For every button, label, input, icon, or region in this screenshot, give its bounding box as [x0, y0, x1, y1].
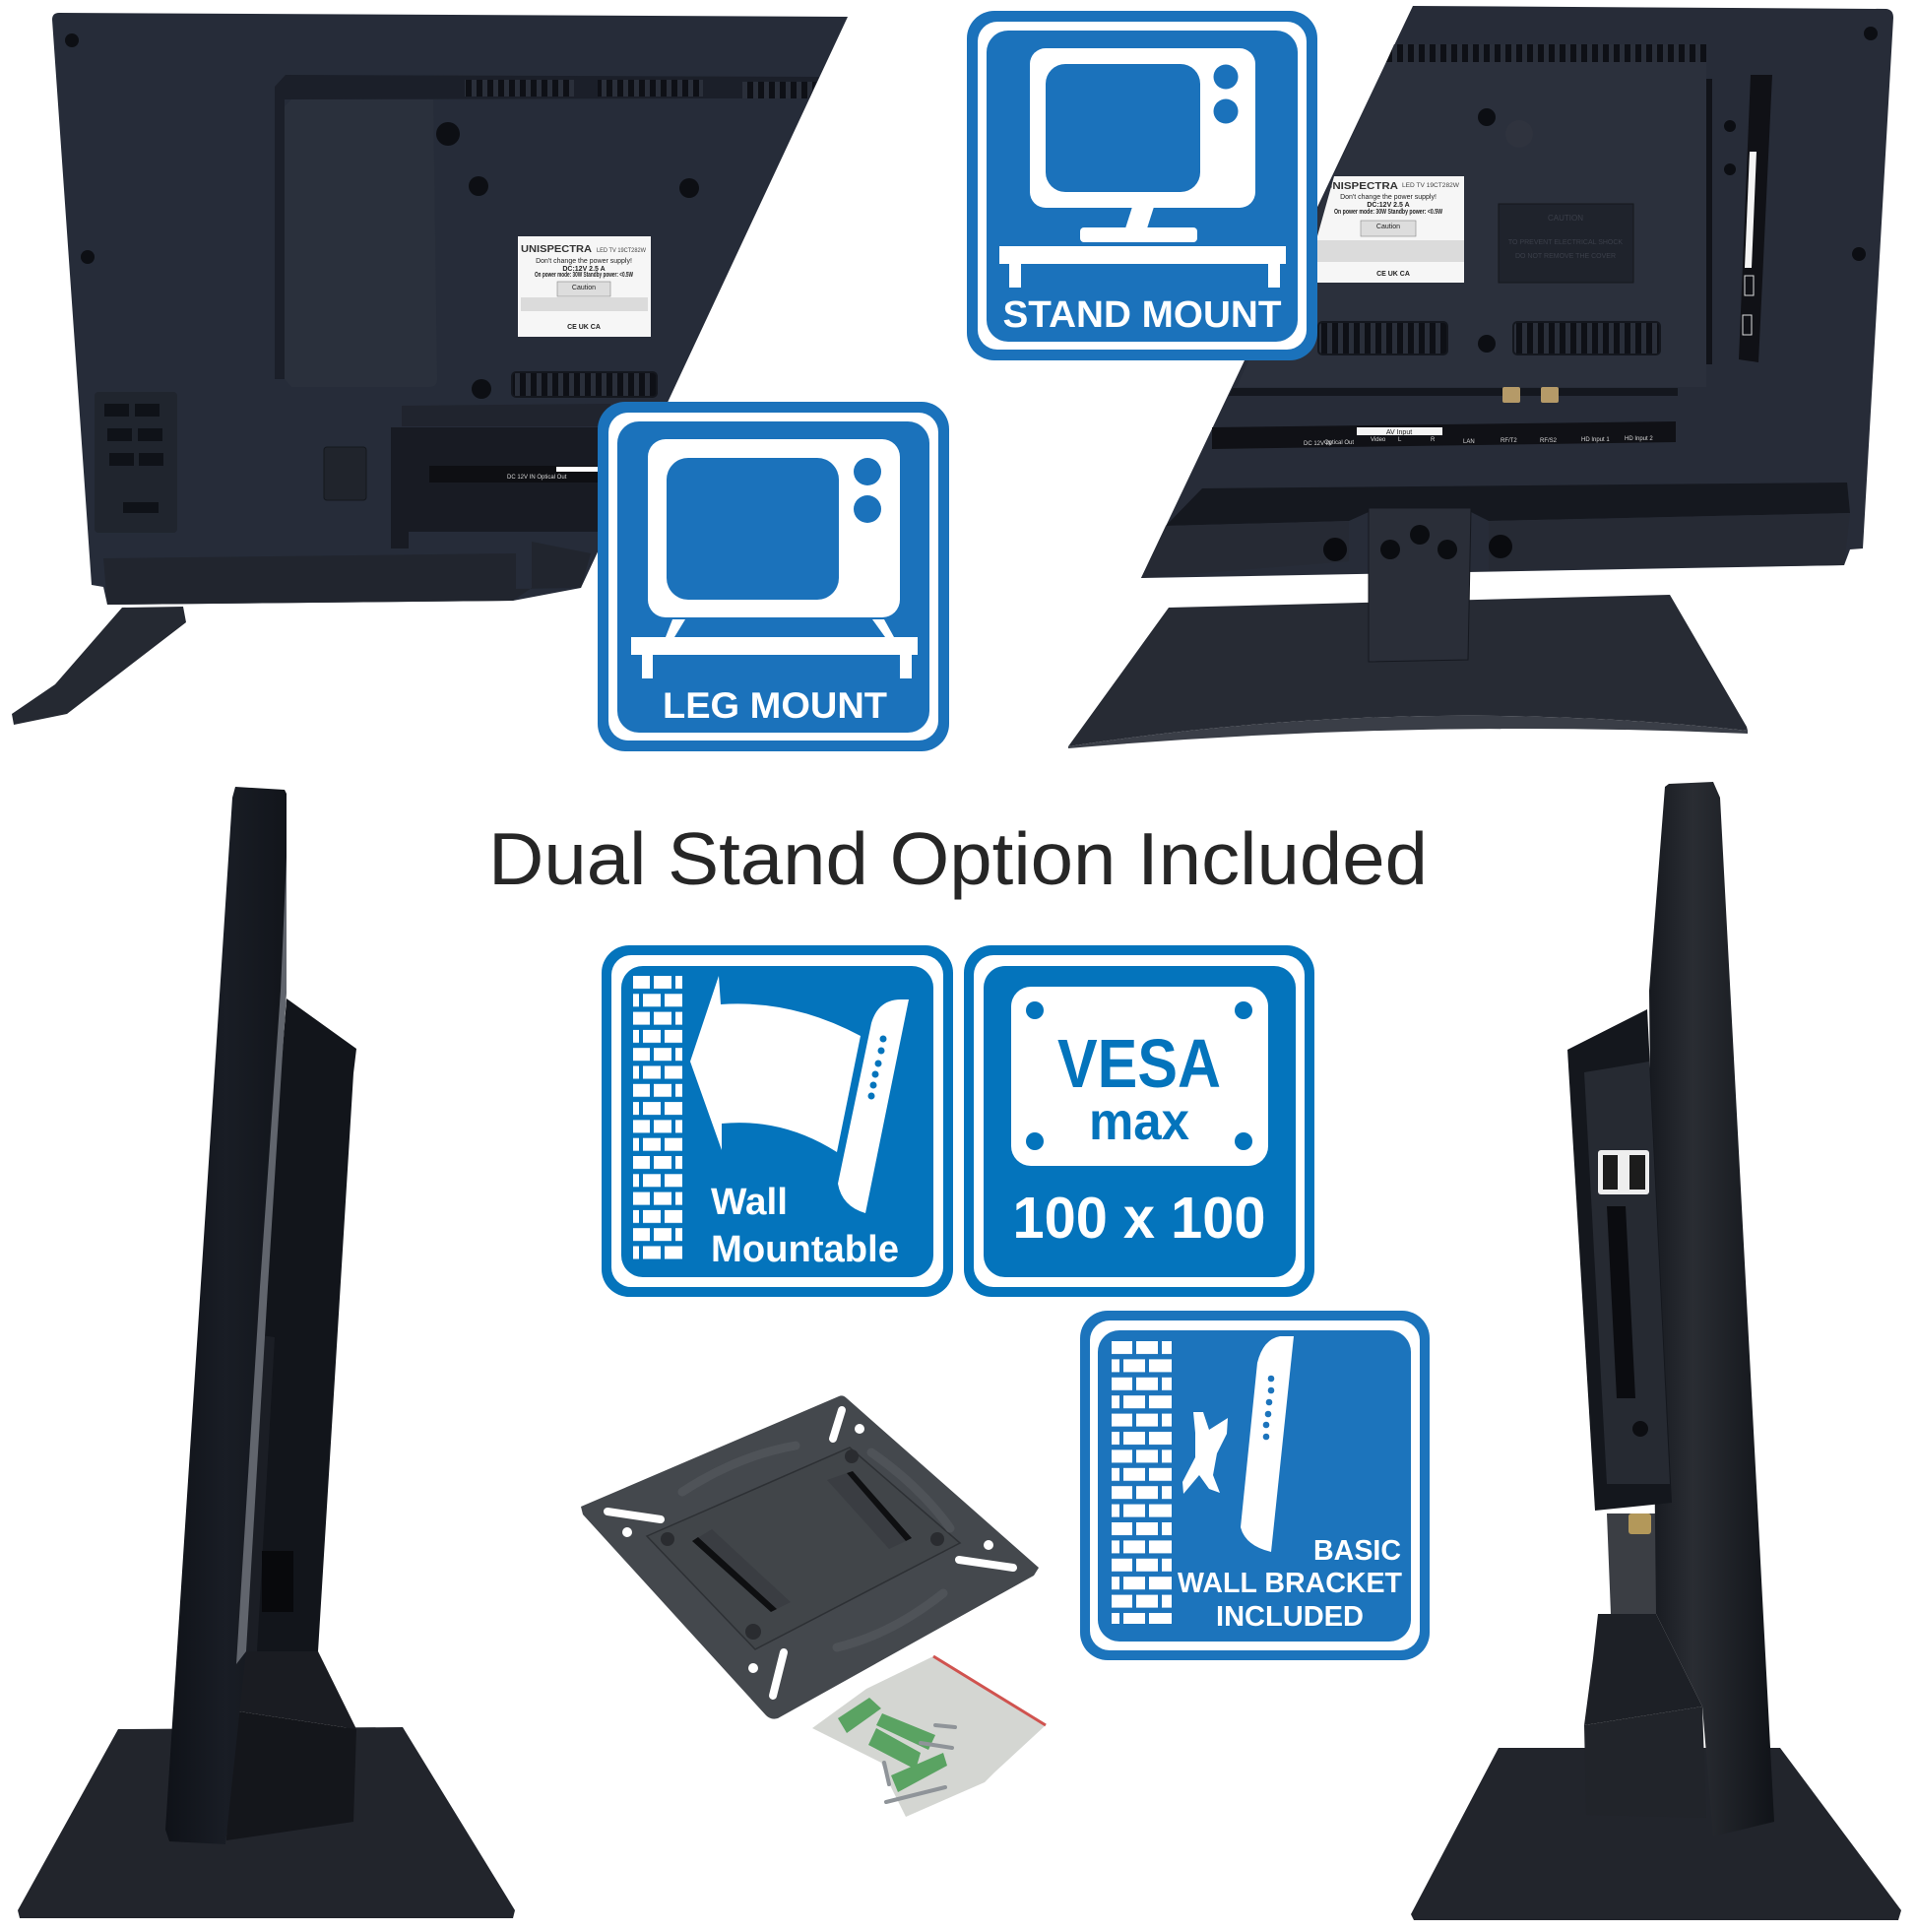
bottom port strip: DC 12V IN — [1304, 441, 1332, 447]
slope under housing — [232, 1651, 356, 1729]
rating label — [518, 236, 651, 337]
badge: wall mountable — [602, 945, 953, 1297]
raised centre plate — [647, 1448, 960, 1649]
side I/O housing — [1567, 1009, 1672, 1511]
wall plugs — [838, 1698, 947, 1792]
badge: VESA 100 x 100 — [964, 945, 1314, 1297]
square base — [1411, 1748, 1901, 1920]
bottom port strip: L — [1398, 437, 1402, 443]
bottom bar left — [1141, 521, 1349, 578]
rating label: UNISPECTRA — [1324, 180, 1398, 192]
icon: brick wall — [633, 976, 682, 1259]
bottom port strip — [1212, 421, 1676, 449]
light edge strip — [236, 857, 287, 1664]
side buttons panel — [95, 392, 177, 533]
label: basic wall bracket included: BASIC — [1313, 1535, 1401, 1567]
embossed caution: TO PREVENT ELECTRICAL SHOCK — [1508, 239, 1623, 246]
photo: TV rear view with pedestal stand — [1068, 6, 1893, 748]
label: wall mountable: Mountable — [711, 1229, 899, 1270]
side port strip — [1739, 75, 1772, 362]
bottom dark band — [1166, 483, 1850, 526]
pedestal base — [1068, 595, 1748, 746]
label: basic wall bracket included: WALL BRACKET — [1178, 1568, 1402, 1599]
stand bar — [103, 542, 591, 605]
photo: TV rear view with leg stand — [12, 13, 848, 725]
rating label: CE UK CA — [1376, 271, 1410, 278]
photo: TV rear view with leg stand: DC 12V IN Optical Out — [507, 475, 567, 481]
embossed ribs — [682, 1446, 950, 1647]
icon: brick wall — [1112, 1341, 1172, 1624]
badge: basic wall bracket included — [1080, 1311, 1430, 1660]
lower vent — [512, 372, 657, 397]
rating label: Caution — [572, 285, 596, 291]
bottom port strip: HD Input 2 — [1625, 436, 1653, 442]
top vent band — [1386, 44, 1706, 62]
card slot — [1607, 1206, 1635, 1398]
slot cut-outs — [607, 1410, 1013, 1696]
badge: leg mount — [598, 402, 949, 751]
rear housing — [242, 998, 356, 1651]
rating label: Don't change the power supply! — [536, 258, 632, 265]
icon: TV on pedestal — [999, 48, 1286, 288]
panel shadow ledge — [1229, 388, 1678, 396]
bottom port strip: AV Input — [1386, 429, 1412, 436]
gold connector — [1629, 1513, 1651, 1534]
photo: screw bag — [812, 1656, 1046, 1817]
neck block — [226, 1710, 356, 1840]
screen bezel — [165, 787, 287, 1844]
screw holes — [661, 1449, 944, 1640]
port window — [262, 1551, 293, 1612]
bag seal — [933, 1656, 1046, 1725]
USB ports — [1598, 1150, 1649, 1194]
raised back panel — [1237, 62, 1706, 387]
small cover — [324, 447, 366, 500]
bottom port strip: LAN — [1463, 439, 1475, 445]
rating label: DC:12V 2.5 A — [1367, 202, 1410, 209]
upper slope — [1584, 1614, 1702, 1725]
rating label: On power mode: 30W Standby power: <0.5W — [535, 272, 633, 279]
embossed caution — [1499, 204, 1633, 283]
label: leg mount: LEG MOUNT — [663, 685, 887, 726]
side recess — [1706, 79, 1712, 364]
bar holes — [1323, 535, 1512, 561]
stand neck — [1369, 508, 1471, 662]
badge: stand mount — [967, 11, 1317, 360]
square base — [18, 1727, 515, 1918]
port step and cavity — [402, 404, 610, 426]
label: wall mountable — [711, 1182, 899, 1270]
icon: mounting plate — [1011, 987, 1268, 1166]
label: basic wall bracket included — [1178, 1535, 1402, 1633]
rating label: LED TV 19CT282W — [1402, 183, 1459, 189]
bottom port strip: R — [1431, 437, 1436, 443]
photo: TV left side profile — [18, 787, 515, 1918]
screws — [884, 1725, 955, 1802]
rating label: DC:12V 2.5 A — [562, 266, 606, 273]
inner panel — [285, 99, 437, 387]
bottom port strip: RF/T2 — [1501, 438, 1517, 444]
RF connectors — [1502, 387, 1559, 403]
rating label: Don't change the power supply! — [1340, 194, 1437, 201]
round holes — [622, 1424, 993, 1673]
label: basic wall bracket included: INCLUDED — [1216, 1601, 1364, 1633]
icon: retro TV on legs — [631, 439, 918, 678]
label: stand mount: STAND MOUNT — [1002, 294, 1282, 336]
label: wall mountable: Wall — [711, 1182, 788, 1223]
bottom bar right — [1489, 513, 1850, 570]
bottom port strip: Optical Out — [1324, 440, 1354, 446]
embossed caution: CAUTION — [1548, 214, 1583, 223]
photo: wall bracket plate — [581, 1395, 1039, 1719]
screws — [1478, 27, 1878, 353]
vents upper — [465, 80, 816, 98]
rear housing — [52, 13, 848, 605]
icon: TV side — [1241, 1336, 1294, 1552]
holes and screws — [65, 33, 699, 582]
rear housing — [1141, 6, 1893, 578]
rating label: UNISPECTRA — [521, 243, 592, 255]
vents — [1318, 322, 1660, 354]
bottom port strip: Video — [1371, 437, 1386, 443]
heading: Dual Stand Option Included — [488, 817, 1428, 900]
photo: TV right side profile — [1411, 782, 1901, 1920]
leg stand foot — [12, 607, 186, 725]
bottom port strip: HD Input 1 — [1581, 437, 1610, 443]
tabs — [692, 1471, 912, 1612]
audio jack — [1632, 1421, 1648, 1437]
button panel — [242, 1335, 275, 1651]
icon: arrow to wall — [690, 976, 861, 1152]
label: 100 x 100: 100 x 100 — [1012, 1186, 1266, 1251]
rating label: CE UK CA — [567, 324, 601, 331]
rating label: LED TV 19CT282W — [597, 248, 646, 254]
label: VESA: VESA — [1057, 1025, 1221, 1102]
rating label: Caution — [1376, 224, 1400, 230]
block — [1584, 1707, 1706, 1818]
label: max: max — [1089, 1092, 1189, 1151]
rating label — [1309, 176, 1467, 285]
screen bezel — [1649, 782, 1774, 1836]
recessed panel — [275, 75, 819, 379]
icon: TV side — [838, 999, 909, 1213]
rating label: On power mode: 30W Standby power: <0.5W — [1334, 209, 1442, 216]
icon: X bracket — [1182, 1412, 1228, 1494]
neck — [1607, 1513, 1664, 1614]
bottom port strip: RF/S2 — [1540, 438, 1558, 444]
embossed caution: DO NOT REMOVE THE COVER — [1515, 253, 1616, 260]
